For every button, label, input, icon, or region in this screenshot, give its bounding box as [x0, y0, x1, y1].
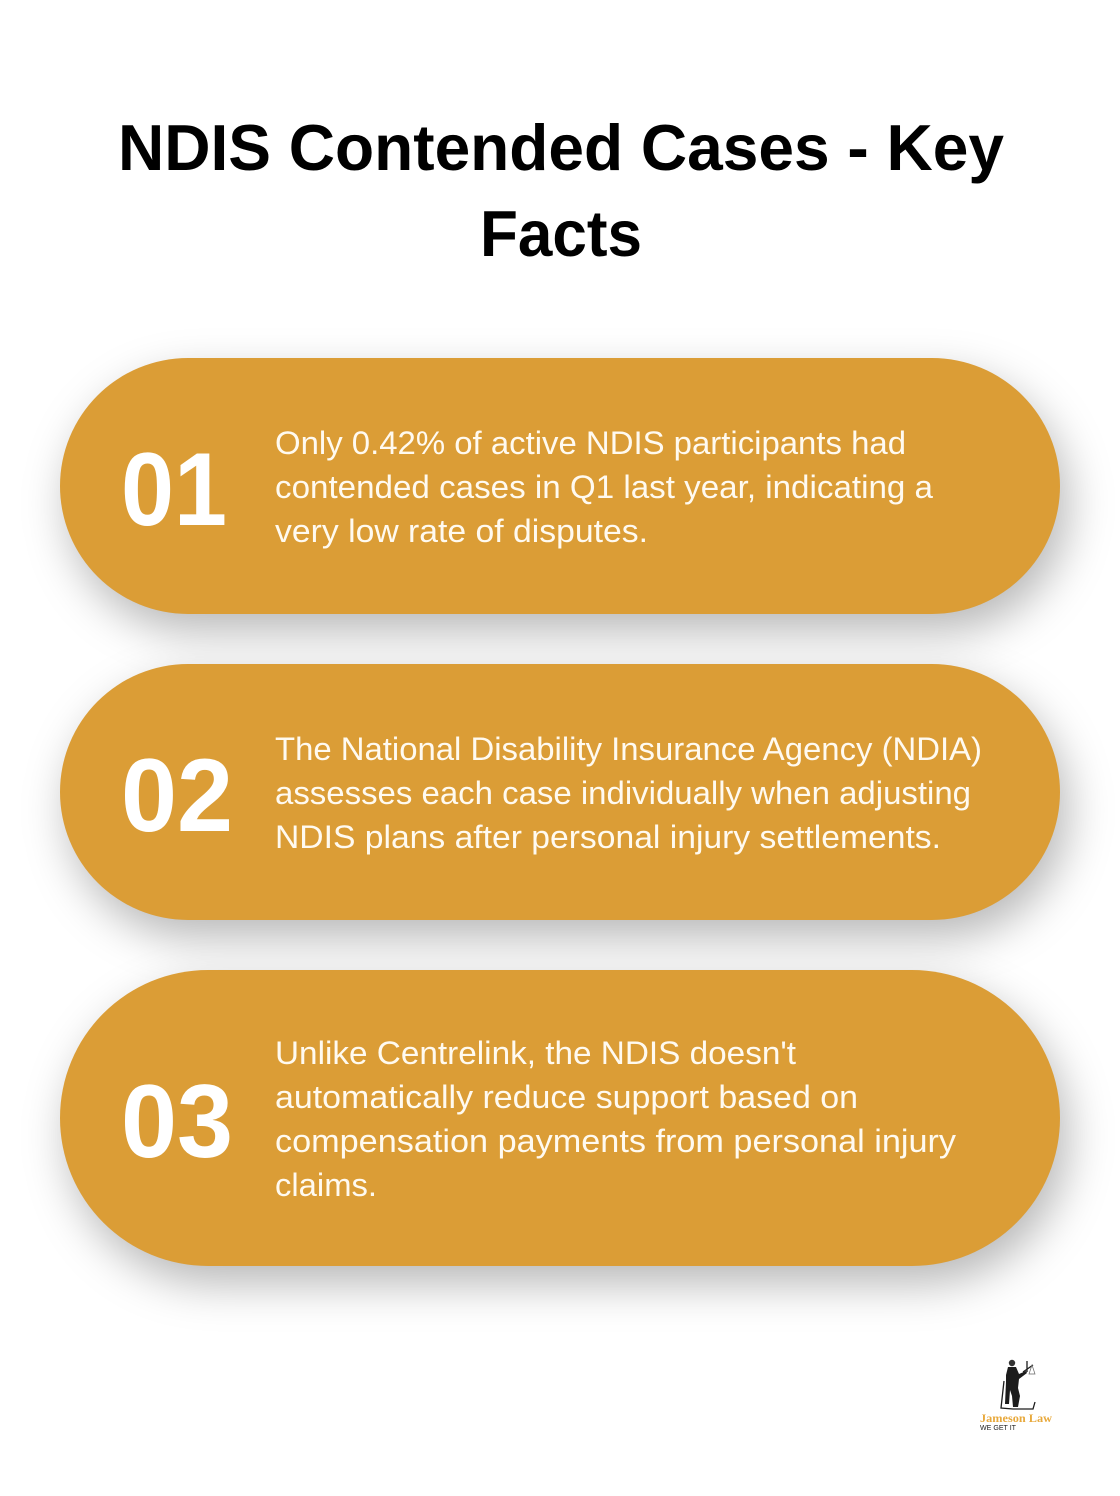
text: fact 03: Unlike Centrelink, the NDIS doesn't [275, 1035, 796, 1071]
title: NDIS Contended Cases - Key [118, 111, 1004, 184]
text: Jameson Law: Jameson Law [980, 1413, 1053, 1425]
text: fact 01: very low rate of disputes. [275, 513, 648, 549]
text: fact 01 [275, 425, 934, 549]
logo: Jameson Law [980, 1360, 1053, 1432]
text: fact 02: assesses each case individually when adjusting [275, 775, 971, 811]
panel: fact 02 [60, 664, 1068, 938]
title [118, 111, 1004, 270]
number 03: 03 [121, 1064, 233, 1180]
panel: fact 03 [60, 970, 1068, 1284]
text: fact 01: Only 0.42% of active NDIS participants had [275, 425, 906, 461]
text: fact 03: automatically reduce support based on [275, 1079, 858, 1115]
icon: lady justice [1001, 1360, 1035, 1409]
title: Facts [480, 197, 642, 270]
text: fact 01: contended cases in Q1 last year, indicating a [275, 469, 934, 505]
text: fact 02: The National Disability Insurance Agency (NDIA) [275, 731, 982, 767]
text: fact 02: NDIS plans after personal injury settlements. [275, 819, 941, 855]
text: fact 03 [275, 1035, 957, 1203]
number 01: 01 [121, 432, 227, 548]
text: fact 03: claims. [275, 1167, 377, 1203]
text: fact 02 [275, 731, 982, 855]
text: fact 03: compensation payments from personal injury [275, 1123, 957, 1159]
panel: fact 01 [60, 358, 1068, 632]
text: WE GET IT: WE GET IT [980, 1425, 1017, 1432]
number 02: 02 [121, 738, 233, 854]
